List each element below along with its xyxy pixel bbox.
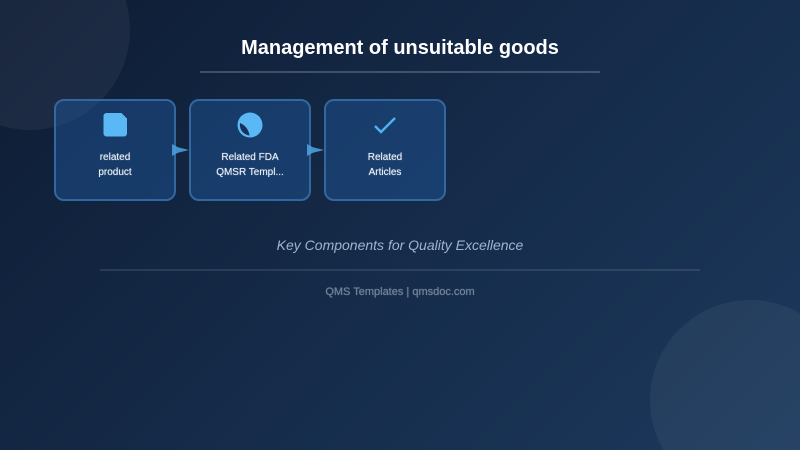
arrow: first to second bbox=[172, 144, 189, 156]
title: Management of unsuitable goods bbox=[241, 37, 559, 59]
panel: related product bbox=[54, 99, 176, 201]
icon: document bbox=[104, 113, 127, 136]
icon: check mark bbox=[374, 117, 396, 134]
label: related FDA QMSR templates bbox=[216, 152, 284, 178]
icon: globe bbox=[238, 112, 262, 138]
panel: related articles bbox=[324, 99, 446, 201]
footer: QMS Templates | qmsdoc.com bbox=[325, 286, 475, 298]
label: related articles: Articles bbox=[369, 167, 401, 178]
label: related FDA QMSR templates: QMSR Templ... bbox=[216, 167, 284, 178]
label: related product: related bbox=[100, 152, 130, 163]
label: related product bbox=[98, 152, 132, 178]
arrow: second to third bbox=[307, 144, 324, 156]
label: related product: product bbox=[98, 167, 132, 178]
label: related articles bbox=[368, 152, 402, 178]
label: related FDA QMSR templates: Related FDA bbox=[221, 152, 279, 163]
label: related articles: Related bbox=[368, 152, 402, 163]
panel: related FDA QMSR templates bbox=[189, 99, 311, 201]
subtitle: Key Components for Quality Excellence bbox=[277, 237, 523, 253]
